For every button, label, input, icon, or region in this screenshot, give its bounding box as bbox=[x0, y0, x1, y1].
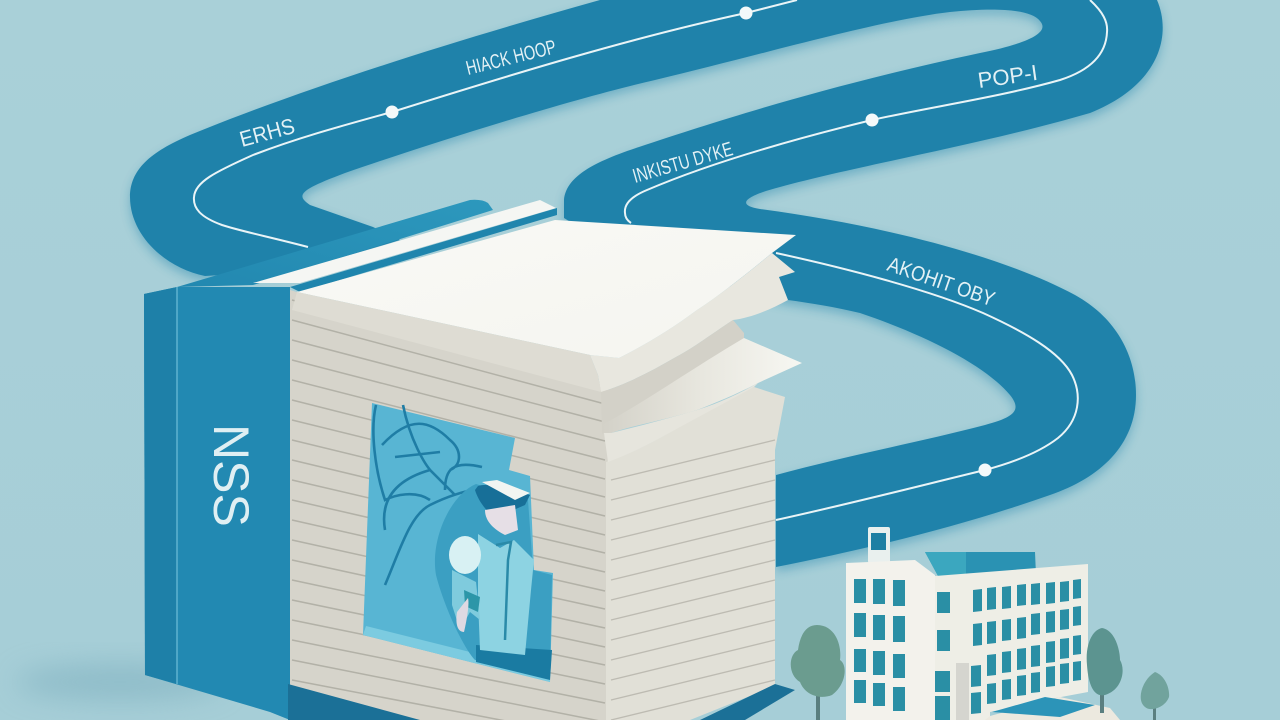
layer under loose page bbox=[604, 383, 758, 462]
page lines front bbox=[292, 300, 605, 720]
back cover bbox=[177, 200, 493, 287]
left wing bbox=[846, 560, 935, 720]
road label: ERHS bbox=[237, 113, 297, 152]
tree far right bbox=[1141, 672, 1169, 720]
sign bbox=[868, 527, 890, 563]
page lines right bbox=[611, 440, 775, 720]
spine title: NSS bbox=[203, 424, 259, 527]
teal roof bbox=[925, 552, 1036, 576]
inner cover strip bbox=[290, 208, 557, 292]
right page block bbox=[606, 387, 785, 720]
winding road bbox=[130, 0, 1163, 567]
hospital building bbox=[846, 527, 1120, 720]
right windows bbox=[971, 579, 1081, 714]
tree left bbox=[791, 625, 845, 720]
tree right bbox=[1087, 628, 1123, 713]
book bbox=[144, 200, 802, 720]
road label: INKISTU DYKE bbox=[630, 138, 735, 188]
bottom cover bbox=[288, 684, 420, 720]
road label: AKOHIT OBY bbox=[884, 253, 998, 311]
forecourt bbox=[985, 697, 1120, 720]
loose page bbox=[602, 338, 802, 433]
illustration panel bbox=[363, 403, 553, 682]
front page block bbox=[290, 290, 612, 720]
curled page layers bbox=[590, 253, 795, 392]
right wing bbox=[935, 564, 1088, 720]
inner white page strip bbox=[253, 200, 556, 283]
figure bbox=[435, 480, 552, 680]
tree bbox=[373, 405, 482, 585]
road route line bbox=[194, 0, 1107, 520]
top page bbox=[297, 220, 796, 358]
left windows bbox=[854, 579, 950, 720]
entrance column bbox=[956, 663, 969, 720]
spine bbox=[144, 287, 290, 720]
road label: HIACK HOOP bbox=[464, 36, 558, 80]
road label: POP-I bbox=[976, 60, 1039, 93]
road shadow bbox=[130, 5, 1163, 572]
ground shadow bbox=[15, 664, 225, 700]
route marker dots bbox=[386, 6, 992, 476]
pool bbox=[992, 697, 1095, 717]
